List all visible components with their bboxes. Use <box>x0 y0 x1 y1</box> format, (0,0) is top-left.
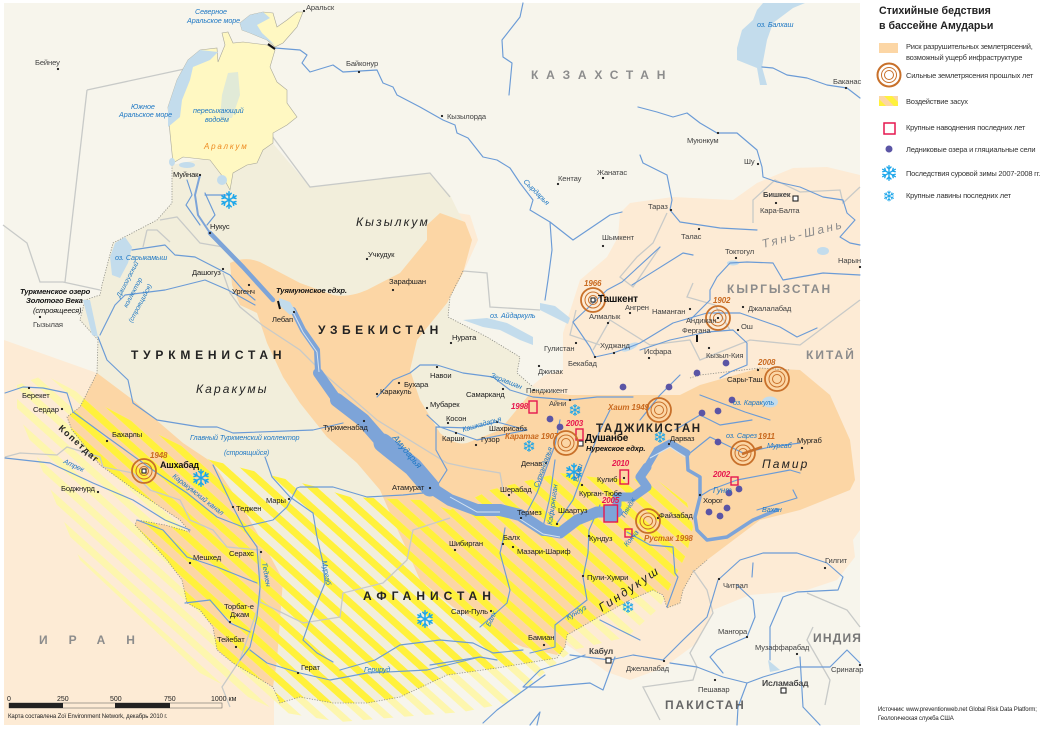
city labels outside basin: Баканас <box>833 77 861 86</box>
legend item: strong earthquakes <box>878 64 1034 86</box>
city labels outside basin: Андижан <box>686 316 716 325</box>
city labels outside basin: Пешавар <box>698 685 729 694</box>
city labels outside basin: Кызылорда <box>447 112 487 121</box>
water labels: Сырдарья <box>522 177 552 207</box>
region names: Аралкум <box>203 142 249 151</box>
region names: Тянь-Шань <box>760 217 846 251</box>
city labels inside basin: Ашхабад <box>160 460 199 470</box>
map: earthquake rings <box>132 288 789 533</box>
region names <box>57 142 846 614</box>
city labels outside basin: Бишкек <box>763 190 791 199</box>
city labels inside basin: Торбат-е <box>224 602 254 611</box>
water labels: оз. Каракуль <box>733 398 774 407</box>
city labels inside basin: Бамиан <box>528 633 554 642</box>
city labels inside basin: Бахарлы <box>112 430 142 439</box>
water labels: Теджен <box>260 562 273 587</box>
flood year labels <box>511 402 731 505</box>
region names: Копетдаг <box>57 423 101 465</box>
city labels inside basin: Файзабад <box>659 511 693 520</box>
city labels outside basin: Кызыл-Кия <box>706 351 743 360</box>
scale bar: 500 <box>110 696 122 703</box>
city labels outside basin: Кара-Балта <box>760 206 800 215</box>
city labels inside basin: Хорог <box>703 496 723 505</box>
region names: Кызылкум <box>356 215 430 229</box>
map: Aralkum dry seabed <box>168 32 297 190</box>
legend title: в бассейне Амударьи <box>879 20 993 32</box>
legend item: floods <box>884 123 1026 134</box>
region names: Гиндукуш <box>596 563 663 614</box>
water labels: Дашогузский <box>114 260 141 300</box>
legend item: glacial lakes: Ледниковые озера и гляциальные сели <box>906 145 1035 154</box>
map area: drought stripes outside basin <box>17 375 693 722</box>
water labels: Аральское море <box>118 110 172 119</box>
city labels outside basin: Жанатас <box>597 168 627 177</box>
city labels inside basin: Атамурат <box>392 483 425 492</box>
legend item: drought <box>879 96 968 106</box>
city labels inside basin: Джам <box>230 610 249 619</box>
city labels inside basin: Туркменабад <box>323 423 368 432</box>
city labels inside basin: Берекет <box>22 391 50 400</box>
map: basin boundary dotted line <box>67 165 707 703</box>
city labels outside basin: Тараз <box>648 202 668 211</box>
water labels: Атрек <box>61 456 86 474</box>
map credit: Карта составлена Zoï Environment Network, декабрь 2010 г. <box>8 714 168 720</box>
source note: Геологическая служба США <box>878 716 954 722</box>
water labels: Вахш <box>571 463 585 483</box>
city labels outside basin: Нарын <box>838 256 861 265</box>
map: flood markers <box>529 401 738 537</box>
city labels outside basin: Алмалык <box>589 312 621 321</box>
legend item: severe winter: Последствия суровой зимы 2007-2008 гг. <box>906 169 1040 178</box>
city labels inside basin: Мешхед <box>193 553 222 562</box>
country names <box>39 68 862 712</box>
water labels: Зеравшан <box>489 371 524 391</box>
country names: УЗБЕКИСТАН <box>318 323 443 337</box>
map: snowflake icons severe winter <box>194 192 581 627</box>
city labels outside basin: Шымкент <box>602 233 635 242</box>
city labels inside basin: Навои <box>430 371 451 380</box>
city labels outside basin: Токтогул <box>725 247 754 256</box>
source note: Источник: www.preventionweb.net Global Risk Data Platform; <box>878 707 1037 713</box>
city labels inside basin: Сары-Таш <box>727 375 763 384</box>
city labels inside basin: Дашогуз <box>192 268 221 277</box>
earthquake year labels: 2008 <box>757 358 776 367</box>
country names: КЫРГЫЗСТАН <box>727 282 832 296</box>
city labels outside basin: Мангора <box>718 627 748 636</box>
water labels: (строящийся) <box>224 449 269 457</box>
map: small lakes <box>83 3 829 672</box>
city labels inside basin: Каракуль <box>380 387 412 396</box>
country names: ИНДИЯ <box>813 631 862 645</box>
map: purple glacial lake markers <box>547 360 742 519</box>
city labels inside basin: Зарафшан <box>389 277 426 286</box>
city labels inside basin: Мары <box>266 496 286 505</box>
water labels: Пяндж <box>619 495 638 519</box>
map: drying reservoir hatching <box>220 72 240 118</box>
city labels inside basin: Шахрисабз <box>489 424 528 433</box>
earthquake year labels: 1966 <box>584 279 602 288</box>
water labels: Кокча <box>622 528 641 548</box>
city labels inside basin: Карши <box>442 434 465 443</box>
water labels: Мургаб <box>320 560 333 587</box>
water labels: Кундуз <box>564 603 589 622</box>
legend title <box>879 5 993 32</box>
earthquake year labels: 1911 <box>758 432 775 441</box>
city labels outside basin: Аральск <box>306 3 335 12</box>
source note <box>878 707 1037 722</box>
flood year labels: 2005 <box>601 496 620 505</box>
city labels inside basin: Туркменское озеро <box>20 287 91 296</box>
water labels: оз. Сарез <box>726 431 758 440</box>
legend title: Стихийные бедствия <box>879 5 991 17</box>
map area: basin territory <box>67 140 855 703</box>
water labels: оз. Сарыкамыш <box>115 253 167 262</box>
scale bar: 1000 км <box>211 696 237 703</box>
earthquake year labels: Каратаг 1907 <box>505 432 559 441</box>
city labels outside basin: Джизак <box>538 367 563 376</box>
country names: КИТАЙ <box>806 347 856 362</box>
region names: Каракумы <box>196 382 269 396</box>
legend <box>878 5 1040 201</box>
water labels: Вахан <box>762 505 782 514</box>
country names: ИРАН <box>39 633 156 647</box>
earthquake year labels: 1948 <box>150 451 168 460</box>
city labels inside basin: Денав <box>521 459 542 468</box>
map: city points <box>29 11 860 680</box>
city labels inside basin: Боджнурд <box>61 484 96 493</box>
flood year labels: 2002 <box>712 470 731 479</box>
city labels outside basin: Гилгит <box>825 556 848 565</box>
city labels inside basin: Дарваз <box>670 434 695 443</box>
water labels: Каракумский канал <box>171 471 226 517</box>
city labels inside basin: Шаартуз <box>558 506 588 515</box>
city labels inside basin: Сари-Пуль <box>451 607 488 616</box>
city labels inside basin: Сердар <box>33 405 59 414</box>
map: Amu Darya light channel centres <box>293 312 685 537</box>
city labels inside basin: Нукус <box>210 222 230 231</box>
map: reservoir dam marks <box>268 44 697 342</box>
city labels outside basin: Джелалабад <box>626 664 670 673</box>
city labels inside basin: Ташкент <box>598 294 638 305</box>
city labels inside basin: Косон <box>446 414 466 423</box>
city labels inside basin: Пули-Хумри <box>587 573 628 582</box>
legend item: floods: Крупные наводнения последних лет <box>906 123 1026 132</box>
map area: earthquake risk outside basin, Iran <box>4 340 283 725</box>
city labels outside basin: Бейнеу <box>35 58 60 67</box>
water labels: коллектор <box>123 276 144 309</box>
earthquake year labels: Рустак 1998 <box>644 534 693 543</box>
legend item: drought: Воздействие засух <box>906 97 968 106</box>
earthquake year labels: Хаит 1949 <box>607 403 650 412</box>
map: South Aral Sea remnant <box>168 50 218 127</box>
city labels inside basin: Ургенч <box>232 287 255 296</box>
water labels: (строящийся) <box>127 283 154 324</box>
water labels: Аральское море <box>186 16 240 25</box>
city labels outside basin: Шу <box>744 157 755 166</box>
water labels <box>61 7 794 674</box>
city labels outside basin: Читрал <box>723 581 748 590</box>
legend item: earthquake risk <box>879 42 1033 62</box>
legend item: earthquake risk: Риск разрушительных землетрясений, <box>906 42 1033 51</box>
city labels inside basin: Гузор <box>481 435 500 444</box>
city labels inside basin: Туямуюнское едхр. <box>276 286 347 295</box>
city labels inside basin: Душанбе <box>585 432 629 444</box>
map area: drought stripes inside basin <box>70 399 693 703</box>
scale bar: 0 <box>7 696 11 703</box>
scale bar: 750 <box>164 696 176 703</box>
country names: ТУРКМЕНИСТАН <box>131 348 286 362</box>
map: North Aral Sea <box>240 12 303 47</box>
city labels inside basin: Теджен <box>236 504 261 513</box>
city labels inside basin: Кундуз <box>589 534 613 543</box>
city labels outside basin: Джалалабад <box>748 304 792 313</box>
city labels inside basin: (строящееся) <box>33 306 82 315</box>
map area: light risk zone north of Zarafshan <box>440 210 478 273</box>
country names: ТАДЖИКИСТАН <box>596 423 702 435</box>
city labels inside basin: Балх <box>503 533 520 542</box>
country names: ПАКИСТАН <box>665 698 746 712</box>
country names: АФГАНИСТАН <box>363 589 496 603</box>
map: Amu Darya main river <box>195 175 777 540</box>
water labels: Южное <box>131 102 155 111</box>
legend item: avalanches: Крупные лавины последних лет <box>906 191 1012 200</box>
water labels: Северное <box>195 7 227 16</box>
map: state borders <box>3 62 860 720</box>
flood year labels: 1998 <box>511 402 529 411</box>
city labels outside basin <box>33 3 863 694</box>
map: snowflake icons avalanches <box>524 404 665 612</box>
water labels: Кафирниган <box>545 484 560 525</box>
city labels inside basin: Муйнак <box>173 170 199 179</box>
city labels outside basin: Ангрен <box>625 303 649 312</box>
city labels inside basin: Кулиб <box>597 475 618 484</box>
map area: earthquake risk outside basin, Tian Shan and Hindu Kush <box>500 167 860 680</box>
city labels outside basin: Ош <box>741 322 753 331</box>
city labels inside basin: Мазари-Шариф <box>517 547 570 556</box>
water labels: водоём <box>205 115 229 124</box>
map: North Aral Sea water <box>240 12 275 45</box>
city labels outside basin: Пенджикент <box>526 386 568 395</box>
city labels inside basin: Термез <box>517 508 542 517</box>
scale bar: 250 <box>57 696 69 703</box>
map area: high earthquake risk, Kopet Dag <box>67 373 283 687</box>
earthquake year labels: 1902 <box>713 296 731 305</box>
city labels inside basin: Нурата <box>452 333 477 342</box>
city labels outside basin: Фергана <box>682 326 711 335</box>
map area: high earthquake risk, Uzbekistan, Tajikistan, Afghanistan <box>230 213 855 655</box>
legend item: strong earthquakes: Сильные землетрясения прошлых лет <box>906 71 1034 80</box>
map: dotted boundary east <box>448 271 790 387</box>
city labels outside basin: Наманган <box>652 307 685 316</box>
water labels: Сурхандарья <box>531 446 554 489</box>
city labels outside basin: Кентау <box>558 174 582 183</box>
earthquake year labels <box>150 279 776 543</box>
city labels inside basin: Лебап <box>272 315 293 324</box>
city labels outside basin: Гулистан <box>544 344 574 353</box>
flood year labels: 2010 <box>611 459 630 468</box>
city labels inside basin: Учкудук <box>368 250 395 259</box>
city labels inside basin: Шерабад <box>500 485 532 494</box>
water labels: Герируд <box>364 665 390 674</box>
legend item: severe winter <box>883 166 1040 180</box>
city labels outside basin: Сринагар <box>831 665 863 674</box>
city labels inside basin: Бухара <box>404 380 429 389</box>
flood year labels: 2003 <box>565 419 584 428</box>
water labels: пересыхающий <box>193 106 244 115</box>
city labels outside basin: Айни <box>549 399 566 408</box>
city labels inside basin: Курган-Тюбе <box>579 489 622 498</box>
water labels: оз. Балхаш <box>757 20 794 29</box>
city labels outside basin: Байконур <box>346 59 378 68</box>
city labels outside basin: Кабул <box>589 646 613 656</box>
city labels outside basin: Исламабад <box>762 678 809 688</box>
city labels outside basin: Муюнкум <box>687 136 718 145</box>
city labels outside basin: Гызылая <box>33 320 63 329</box>
region names: Памир <box>762 457 809 471</box>
scale bar <box>7 696 237 708</box>
water labels: Балх <box>484 609 499 628</box>
water labels: Кашкадарья <box>461 414 502 434</box>
water labels: Амударья <box>390 432 424 470</box>
city labels inside basin: Тейебат <box>217 635 245 644</box>
city labels outside basin: Худжанд <box>600 341 631 350</box>
city labels inside basin: Шибирган <box>449 539 483 548</box>
city labels inside basin: Мубарек <box>430 400 460 409</box>
country names: КАЗАХСТАН <box>531 68 673 82</box>
city labels outside basin: Исфара <box>644 347 672 356</box>
water labels: оз. Айдаркуль <box>490 311 536 320</box>
city labels inside basin: Нурекское едхр. <box>586 444 645 453</box>
legend item: earthquake risk: возможный ущерб инфраструктуре <box>906 53 1022 62</box>
city labels inside basin: Серахс <box>229 549 254 558</box>
city labels outside basin: Талас <box>681 232 702 241</box>
water labels: Главный Туркменский коллектор <box>190 433 300 442</box>
city labels inside basin: Герат <box>301 663 321 672</box>
water labels: Гунт <box>713 486 732 495</box>
city labels inside basin <box>20 170 822 672</box>
map: capital squares <box>142 196 798 693</box>
city labels inside basin: Золотого Века <box>26 296 83 305</box>
map: Tuyamuyun reservoir <box>279 298 296 315</box>
city labels inside basin: Самарканд <box>466 390 505 399</box>
city labels outside basin: Бекабад <box>568 359 597 368</box>
water labels: Мургаб <box>767 441 793 450</box>
city labels outside basin: Музаффарабад <box>755 643 810 652</box>
city labels inside basin: Мургаб <box>797 436 822 445</box>
